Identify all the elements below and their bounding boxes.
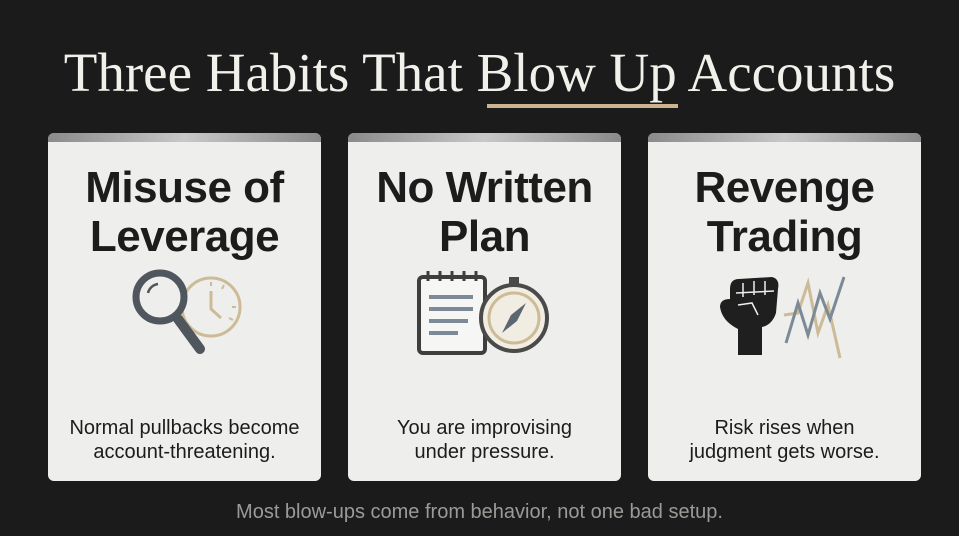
heading: Trading: [707, 212, 862, 261]
heading: [85, 163, 284, 261]
footer: Most blow-ups come from behavior, not one bad setup.: [236, 501, 723, 523]
description: [69, 417, 300, 463]
heading: Plan: [439, 212, 530, 261]
description: [689, 417, 880, 463]
icon: magnifier and clock: [132, 270, 242, 354]
description: judgment gets worse.: [689, 441, 880, 463]
icon: notepad and compass: [417, 271, 549, 355]
description: under pressure.: [414, 441, 555, 463]
panel: revenge trading: [648, 133, 921, 481]
description: Normal pullbacks become: [69, 417, 300, 439]
description: You are improvising: [397, 417, 572, 439]
description: Risk rises when: [714, 417, 855, 439]
description: account-threatening.: [93, 441, 276, 463]
title underline: [487, 104, 678, 108]
panel: misuse of leverage: [48, 133, 321, 481]
icon: fist and volatile chart: [720, 276, 846, 358]
heading: Leverage: [90, 212, 279, 261]
heading: Misuse of: [85, 163, 284, 212]
heading: [376, 163, 593, 261]
title: Three Habits That Blow Up Accounts: [64, 42, 895, 103]
heading: No Written: [376, 163, 593, 212]
heading: Revenge: [695, 163, 874, 212]
panel: no written plan: [348, 133, 621, 481]
description: [397, 417, 572, 463]
heading: [695, 163, 874, 261]
